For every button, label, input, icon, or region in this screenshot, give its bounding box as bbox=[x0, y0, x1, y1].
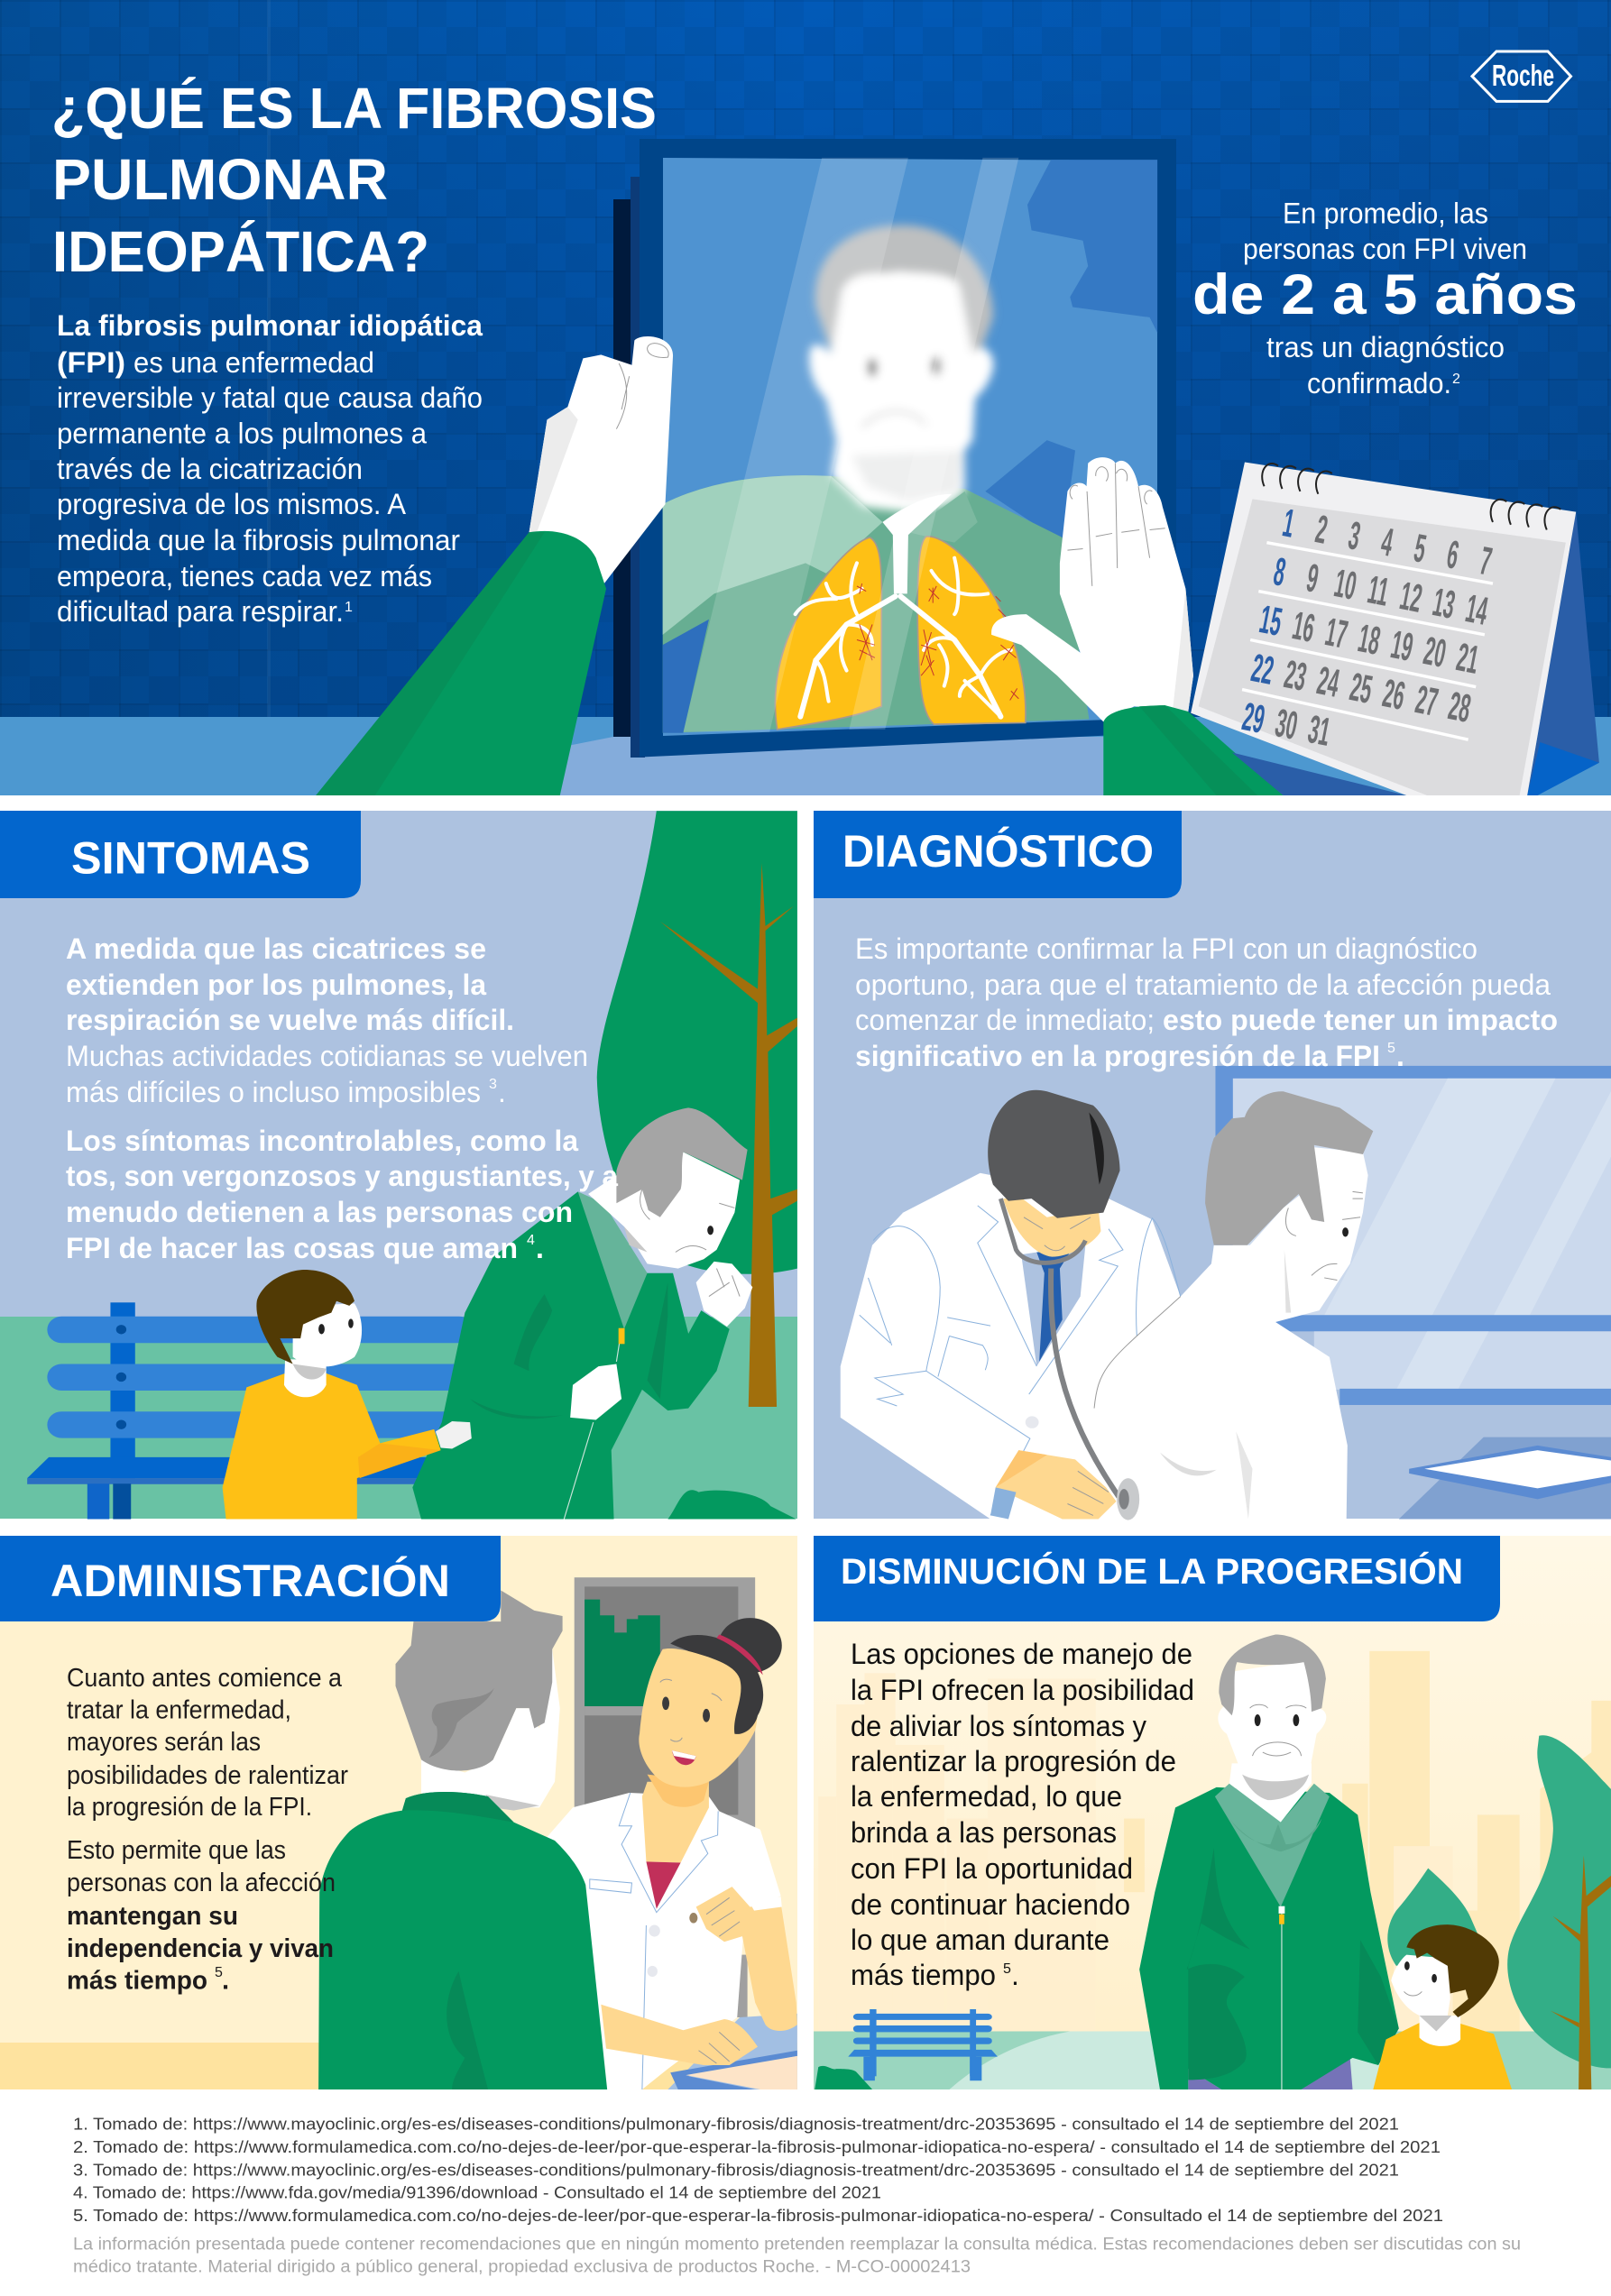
administracion text block: mantengan su bbox=[67, 1902, 238, 1931]
references list: 4. Tomado de: https://www.fda.gov/media/91396/download - Consultado el 14 de septiembre del 2021 bbox=[73, 2182, 881, 2202]
disminucion text block: la FPI ofrecen la posibilidad bbox=[851, 1674, 1194, 1706]
sintomas text block bbox=[66, 932, 618, 1264]
disminucion heading tab bbox=[814, 1536, 1500, 1621]
disminucion text block: más tiempo bbox=[851, 1959, 996, 1991]
calendar day numbers: 6 bbox=[1443, 533, 1462, 578]
park illustration: skyline, bench, trees, man and boy bbox=[814, 1634, 1611, 2089]
disminucion text block: 5 bbox=[1003, 1961, 1011, 1977]
calendar day numbers: 13 bbox=[1429, 581, 1459, 628]
calendar day numbers: 31 bbox=[1304, 708, 1334, 755]
sintomas text block: menudo detienen a las personas con bbox=[66, 1196, 573, 1228]
calendar day numbers: 26 bbox=[1379, 672, 1408, 719]
administracion text block: personas con la afección bbox=[67, 1869, 336, 1897]
monitor with patient x-ray bbox=[613, 139, 1176, 758]
intro text block: través de la cicatrización bbox=[57, 453, 363, 485]
Roche logo bbox=[1472, 51, 1571, 101]
older man bbox=[1139, 1634, 1399, 2089]
intro text block: permanente a los pulmones a bbox=[57, 417, 427, 449]
blurred patient figure bbox=[809, 225, 993, 512]
title: PULMONAR bbox=[52, 147, 388, 212]
panel: sintomas bbox=[0, 811, 797, 1520]
administracion text block: . bbox=[222, 1966, 229, 1995]
diagnostico text block: esto puede tener un impacto bbox=[1163, 1004, 1558, 1036]
sintomas text block: tos, son vergonzosos y angustiantes, y a bbox=[66, 1160, 618, 1192]
doctor bbox=[841, 1090, 1181, 1520]
calendar day numbers: 4 bbox=[1377, 520, 1396, 565]
calendar day numbers: 17 bbox=[1321, 611, 1351, 657]
intro text block: La fibrosis pulmonar idiopática bbox=[57, 309, 483, 342]
calendar day numbers: 28 bbox=[1445, 684, 1474, 731]
administracion text block: la progresión de la FPI. bbox=[67, 1793, 312, 1822]
sintomas text block: Los síntomas incontrolables, como la bbox=[66, 1125, 578, 1157]
diagnostico text block: 5 bbox=[1387, 1041, 1395, 1056]
administracion text block bbox=[67, 1664, 348, 1995]
Roche logo: Roche bbox=[1492, 59, 1554, 92]
administracion text block: posibilidades de ralentizar bbox=[67, 1761, 348, 1790]
diagnostico text block: Es importante confirmar la FPI con un diagnóstico bbox=[855, 932, 1478, 965]
calendar day numbers: 2 bbox=[1312, 508, 1330, 553]
coughing man bbox=[412, 1107, 752, 1520]
disclaimer: médico tratante. Material dirigido a público general, propiedad exclusiva de productos Roche. - M-CO-00002413 bbox=[73, 2258, 971, 2276]
man from behind bbox=[318, 1590, 607, 2089]
diagnostico text block: significativo en la progresión de la FPI bbox=[855, 1040, 1380, 1072]
disminucion text block: de aliviar los síntomas y bbox=[851, 1710, 1146, 1742]
bench bbox=[27, 1302, 474, 1520]
administracion text block: Cuanto antes comience a bbox=[67, 1664, 343, 1693]
calendar day numbers: 9 bbox=[1303, 556, 1321, 602]
disminucion heading tab: DISMINUCIÓN DE LA PROGRESIÓN bbox=[841, 1550, 1463, 1592]
calendar day numbers bbox=[1238, 501, 1495, 755]
survival statistic: confirmado. bbox=[1307, 367, 1451, 400]
calendar day numbers: 7 bbox=[1477, 539, 1495, 584]
intro text block: medida que la fibrosis pulmonar bbox=[57, 524, 460, 556]
administracion text block: tratar la enfermedad, bbox=[67, 1695, 291, 1724]
references list: 1. Tomado de: https://www.mayoclinic.org/es-es/diseases-conditions/pulmonary-fibrosis/diagnosis-treatment/drc-20353695 - consultado el 14 de septiembre del 2021 bbox=[73, 2114, 1399, 2134]
title bbox=[51, 76, 657, 284]
boy bbox=[223, 1270, 472, 1520]
title: IDEOPÁTICA? bbox=[52, 219, 429, 284]
diagnostico text block: comenzar de inmediato; bbox=[855, 1004, 1155, 1036]
panel: disminucion de la progresion bbox=[814, 1536, 1611, 2089]
calendar day numbers: 12 bbox=[1396, 574, 1425, 621]
intro text block bbox=[57, 309, 483, 628]
calendar day numbers: 22 bbox=[1247, 647, 1277, 693]
stethoscope and doctor's hand bbox=[990, 1269, 1139, 1520]
calendar day numbers: 30 bbox=[1272, 702, 1301, 748]
survival statistic: En promedio, las bbox=[1283, 197, 1488, 229]
calendar day numbers: 20 bbox=[1420, 629, 1450, 676]
survival statistic: personas con FPI viven bbox=[1243, 233, 1527, 265]
table and paper bbox=[1399, 1437, 1611, 1520]
left sleeve and hand bbox=[316, 336, 673, 795]
disminucion text block: . bbox=[1011, 1959, 1019, 1991]
disclaimer bbox=[73, 2235, 1521, 2276]
small bench bbox=[848, 2009, 998, 2080]
disminucion text block: la enfermedad, lo que bbox=[851, 1780, 1122, 1813]
sintomas text block: respiración se vuelve más difícil. bbox=[66, 1004, 514, 1036]
administracion text block: mayores serán las bbox=[67, 1728, 261, 1757]
survival statistic: de 2 a 5 años bbox=[1192, 263, 1578, 326]
calendar day numbers: 23 bbox=[1281, 653, 1310, 700]
sintomas text block: . bbox=[498, 1076, 506, 1108]
survival statistic: tras un diagnóstico bbox=[1266, 331, 1505, 363]
sintomas text block: 3 bbox=[489, 1077, 497, 1092]
calendar day numbers: 5 bbox=[1411, 527, 1430, 572]
disminucion text block: de continuar haciendo bbox=[851, 1888, 1130, 1921]
administracion heading tab bbox=[0, 1536, 501, 1621]
disminucion text block: lo que aman durante bbox=[851, 1924, 1109, 1956]
intro text block: 1 bbox=[345, 600, 353, 615]
consultation illustration: shelf, nurse, man from behind bbox=[318, 1577, 797, 2089]
calendar day numbers: 27 bbox=[1412, 678, 1441, 725]
nurse bbox=[548, 1618, 797, 2089]
administracion text block: más tiempo bbox=[67, 1966, 207, 1995]
sintomas text block: más difíciles o incluso imposibles bbox=[66, 1076, 481, 1108]
intro text block: dificultad para respirar. bbox=[57, 595, 344, 628]
boy with man bbox=[1373, 1924, 1512, 2089]
intro text block: (FPI) bbox=[57, 346, 125, 379]
trees bbox=[1387, 1735, 1611, 2089]
panel: diagnostico bbox=[814, 811, 1611, 1520]
sintomas text block: FPI de hacer las cosas que aman bbox=[66, 1232, 518, 1264]
calendar day numbers: 15 bbox=[1256, 598, 1285, 645]
administracion text block: independencia y vivan bbox=[67, 1934, 334, 1963]
survival statistic: 2 bbox=[1452, 372, 1460, 387]
sintomas text block: extienden por los pulmones, la bbox=[66, 969, 486, 1001]
administracion heading tab: ADMINISTRACIÓN bbox=[51, 1556, 450, 1606]
disminucion text block: brinda a las personas bbox=[851, 1816, 1117, 1849]
clinic illustration: window, table, doctor, patient bbox=[841, 1066, 1611, 1520]
calendar day numbers: 16 bbox=[1289, 604, 1318, 651]
calendar day numbers: 11 bbox=[1364, 568, 1392, 615]
references list: 3. Tomado de: https://www.mayoclinic.org/es-es/diseases-conditions/pulmonary-fibrosis/diagnosis-treatment/drc-20353695 - consultado el 14 de septiembre del 2021 bbox=[73, 2161, 1399, 2179]
calendar day numbers: 21 bbox=[1453, 636, 1482, 683]
calendar bbox=[1191, 463, 1599, 795]
diagnostico heading tab bbox=[814, 811, 1182, 898]
references list: 5. Tomado de: https://www.formulamedica.com.co/no-dejes-de-leer/por-que-esperar-la-fibrosis-pulmonar-idiopatica-no-espera/ - Consultado el 14 de septiembre del 2021 bbox=[73, 2206, 1443, 2225]
disminucion text block: con FPI la oportunidad bbox=[851, 1852, 1133, 1885]
diagnostico text block bbox=[855, 932, 1558, 1072]
calendar day numbers: 10 bbox=[1330, 562, 1360, 609]
references list bbox=[73, 2114, 1443, 2225]
calendar day numbers: 3 bbox=[1345, 514, 1364, 559]
calendar day numbers: 1 bbox=[1279, 501, 1298, 546]
references list: 2. Tomado de: https://www.formulamedica.com.co/no-dejes-de-leer/por-que-esperar-la-fibrosis-pulmonar-idiopatica-no-espera/ - consultado el 14 de septiembre del 2021 bbox=[73, 2137, 1441, 2156]
sintomas text block: . bbox=[536, 1232, 544, 1264]
panel: administracion bbox=[0, 1536, 797, 2089]
administracion text block: 5 bbox=[215, 1965, 223, 1980]
patient bbox=[1094, 1091, 1373, 1520]
sintomas heading tab: SINTOMAS bbox=[71, 833, 310, 884]
intro text block: empeora, tienes cada vez más bbox=[57, 560, 432, 592]
calendar day numbers: 8 bbox=[1270, 550, 1289, 595]
calendar day numbers: 25 bbox=[1347, 666, 1376, 712]
disclaimer: La información presentada puede contener recomendaciones que en ningún momento pretenden reemplazar la consulta médica. Estas recomendaciones deben ser discutidas con su bbox=[73, 2235, 1521, 2255]
sintomas heading tab bbox=[0, 811, 361, 898]
administracion text block: Esto permite que las bbox=[67, 1836, 286, 1865]
right sleeve and hand bbox=[991, 457, 1284, 795]
disminucion text block: Las opciones de manejo de bbox=[851, 1638, 1192, 1670]
shelf bbox=[575, 1577, 755, 2017]
diagnostico heading tab: DIAGNÓSTICO bbox=[842, 826, 1154, 877]
sintomas text block: 4 bbox=[527, 1233, 535, 1248]
calendar day numbers: 14 bbox=[1462, 587, 1491, 634]
disminucion text block: ralentizar la progresión de bbox=[851, 1745, 1176, 1777]
survival statistic bbox=[1192, 197, 1578, 400]
skyline bbox=[818, 1651, 1611, 2031]
park illustration: tree, bench, coughing man, boy bbox=[27, 811, 797, 1520]
title: ¿QUÉ ES LA FIBROSIS bbox=[51, 76, 657, 141]
calendar day numbers: 19 bbox=[1387, 623, 1416, 670]
calendar day numbers: 18 bbox=[1355, 617, 1384, 664]
diagnostico text block: . bbox=[1396, 1040, 1404, 1072]
diagnostico text block: oportuno, para que el tratamiento de la afección pueda bbox=[855, 969, 1551, 1001]
disminucion text block bbox=[851, 1638, 1194, 1991]
sintomas text block: Muchas actividades cotidianas se vuelven bbox=[66, 1040, 588, 1072]
panel: hero bbox=[0, 0, 1611, 795]
intro text block: irreversible y fatal que causa daño bbox=[57, 381, 483, 414]
sintomas text block: A medida que las cicatrices se bbox=[66, 932, 486, 965]
calendar day numbers: 29 bbox=[1238, 695, 1268, 742]
calendar day numbers: 24 bbox=[1313, 659, 1343, 706]
intro text block: es una enfermedad bbox=[133, 346, 374, 379]
intro text block: progresiva de los mismos. A bbox=[57, 488, 407, 520]
lungs bbox=[775, 494, 1026, 730]
window bbox=[1215, 1066, 1611, 1405]
